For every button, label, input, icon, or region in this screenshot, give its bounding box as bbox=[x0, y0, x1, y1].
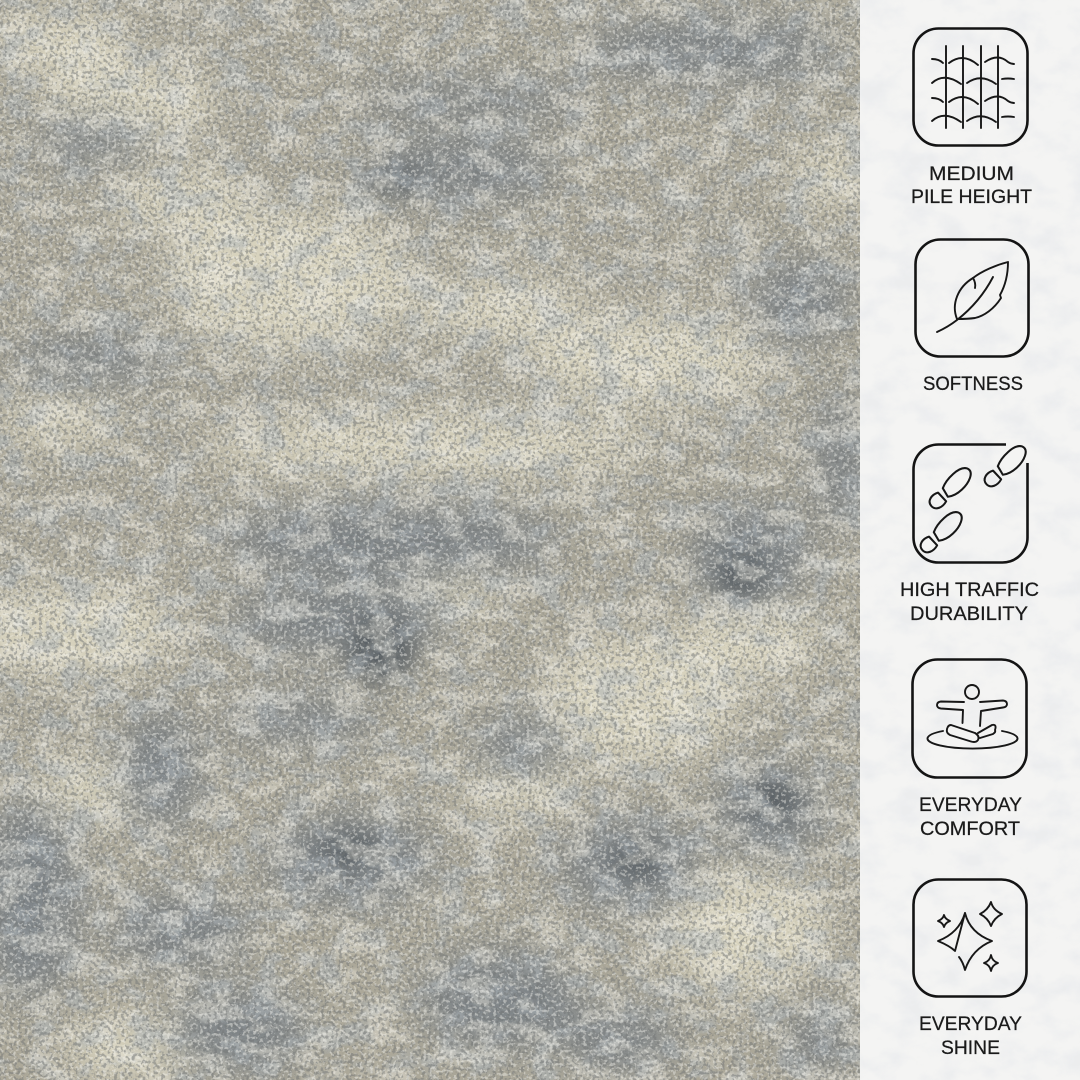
label: everyday shine: EVERYDAY bbox=[919, 1013, 1022, 1035]
feature: everyday comfort bbox=[912, 660, 1026, 840]
icon: footprints bbox=[914, 442, 1031, 562]
icon: pile weave bbox=[914, 28, 1028, 146]
icon: feather bbox=[916, 240, 1028, 356]
label: everyday comfort: COMFORT bbox=[920, 818, 1020, 840]
feature: softness bbox=[916, 240, 1028, 395]
right feature panel background bbox=[860, 0, 1080, 1080]
label: everyday comfort: EVERYDAY bbox=[919, 794, 1022, 816]
label: high traffic durability: HIGH TRAFFIC bbox=[900, 579, 1039, 601]
label: medium pile height: PILE HEIGHT bbox=[911, 186, 1032, 208]
label: everyday shine: SHINE bbox=[941, 1037, 1000, 1059]
feature: high traffic durability bbox=[900, 442, 1039, 625]
feature: everyday shine bbox=[914, 880, 1026, 1059]
feature: medium pile height bbox=[911, 28, 1032, 208]
label: medium pile height: MEDIUM bbox=[929, 163, 1014, 185]
icon: seated person bbox=[912, 660, 1026, 778]
icon: sparkles bbox=[914, 880, 1026, 996]
label: high traffic durability: DURABILITY bbox=[910, 603, 1028, 625]
label: softness: SOFTNESS bbox=[923, 373, 1023, 395]
